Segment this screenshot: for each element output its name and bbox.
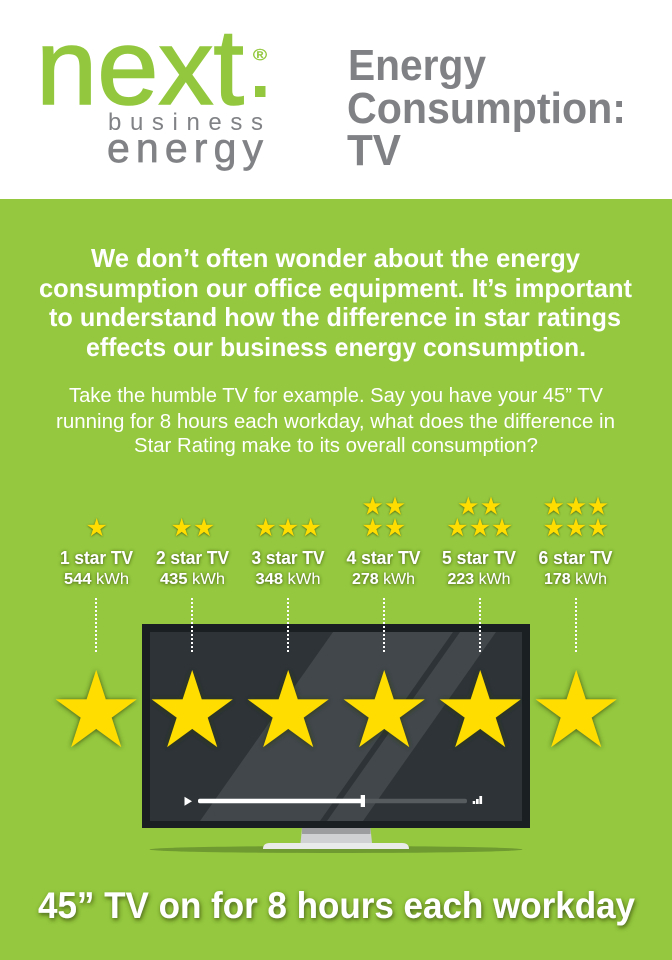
rating labels: 2 star TV bbox=[156, 547, 230, 568]
intro heading text: effects our business energy consumption. bbox=[86, 332, 586, 362]
rating labels bbox=[60, 547, 613, 588]
rating labels: 5 star TV bbox=[442, 547, 517, 568]
rating labels: 4 star TV bbox=[346, 547, 421, 568]
logo: next business energy: business bbox=[108, 109, 263, 136]
video player controls bbox=[184, 795, 482, 807]
large stars bbox=[56, 670, 617, 747]
intro body text: Star Rating make to its overall consumption? bbox=[134, 435, 538, 457]
intro body text bbox=[56, 385, 615, 457]
intro heading text: to understand how the difference in star ratings bbox=[49, 302, 621, 332]
logo: next business energy bbox=[36, 6, 267, 171]
logo: next business energy: next bbox=[36, 6, 244, 127]
intro heading text bbox=[39, 243, 632, 362]
rating labels: 223 kWh bbox=[448, 571, 510, 588]
rating labels: 278 kWh bbox=[352, 571, 415, 588]
logo: next business energy: energy bbox=[107, 125, 264, 171]
title: Consumption: bbox=[347, 84, 626, 133]
floor shadow bbox=[150, 846, 522, 853]
monitor stand bbox=[263, 828, 409, 849]
rating labels: 544 kWh bbox=[64, 571, 129, 588]
intro body text: Take the humble TV for example. Say you have your 45” TV bbox=[69, 385, 604, 407]
TV frame and screen bbox=[142, 624, 530, 828]
green panel background bbox=[0, 199, 672, 960]
dotted connector lines bbox=[96, 598, 576, 654]
title: Energy bbox=[348, 41, 486, 90]
rating labels: 3 star TV bbox=[252, 547, 325, 568]
rating labels: 1 star TV bbox=[60, 547, 134, 568]
rating labels: 348 kWh bbox=[256, 571, 320, 588]
intro heading text: consumption our office equipment. It’s important bbox=[39, 273, 632, 303]
intro body text: running for 8 hours each workday, what does the difference in bbox=[56, 411, 615, 433]
screen reflection bbox=[200, 632, 496, 821]
small star ratings bbox=[87, 496, 608, 536]
bottom caption: 45” TV on for 8 hours each workday bbox=[38, 885, 635, 926]
logo: next business energy: ® bbox=[253, 47, 267, 64]
intro heading text: We don’t often wonder about the energy bbox=[91, 243, 581, 273]
header background bbox=[0, 0, 672, 199]
rating labels: 178 kWh bbox=[544, 571, 607, 588]
title: TV bbox=[347, 126, 402, 175]
rating labels: 6 star TV bbox=[538, 547, 613, 568]
title bbox=[347, 41, 626, 175]
rating labels: 435 kWh bbox=[160, 571, 225, 588]
